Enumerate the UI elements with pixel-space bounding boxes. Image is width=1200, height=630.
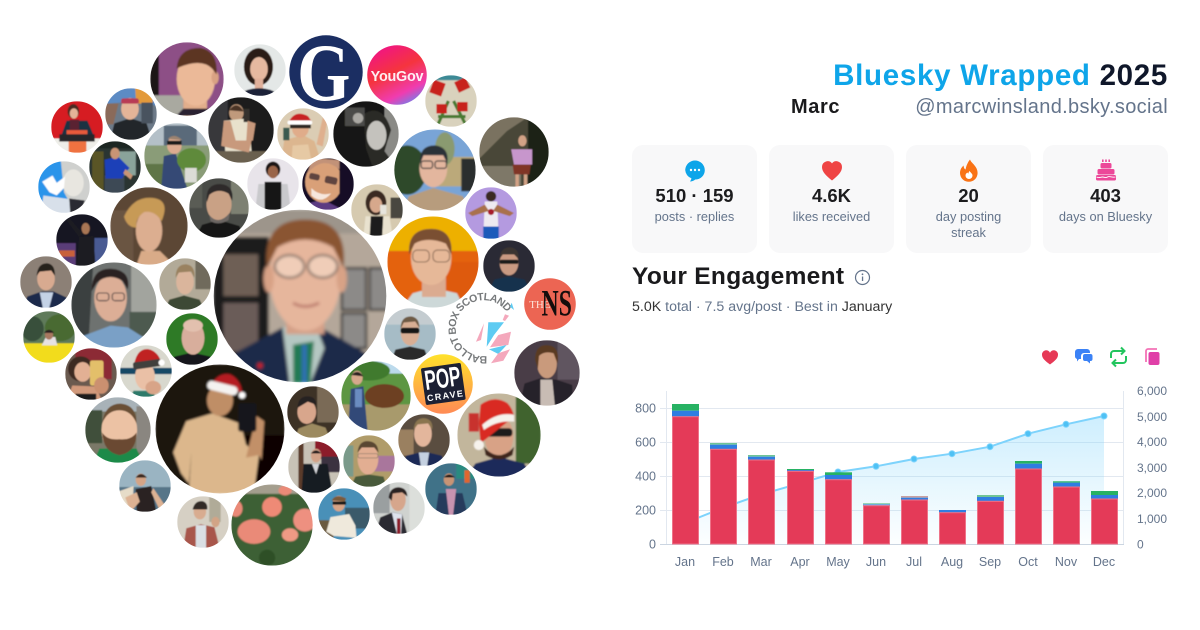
avatar: man in santa hat eating <box>120 345 172 397</box>
avatar: man in plaid shirt <box>177 496 229 548</box>
avatar: woman with dark hair <box>234 44 286 96</box>
avatar: man in sweater with santa hat <box>156 364 284 494</box>
avatar: older man with dark glasses <box>483 240 535 292</box>
right axis labels: 0 <box>1137 538 1144 552</box>
heading: your engagement: Your Engagement <box>632 263 844 290</box>
stat card: posting streak: 20 <box>958 185 979 206</box>
avatar: man with stubble in a room <box>159 258 211 310</box>
stat card: days on Bluesky: days on Bluesky <box>1059 209 1152 224</box>
avatar: man with highland cow <box>341 361 411 431</box>
avatar: man in santa hat with red nose <box>457 393 541 477</box>
avatar: smiling man with glasses, purple tones <box>302 158 354 210</box>
month labels: Jul <box>906 555 922 569</box>
month labels: May <box>826 555 851 569</box>
avatar: man on purple background <box>150 42 224 116</box>
combined bar and line chart <box>635 384 1167 569</box>
avatar: person sitting on rocks <box>479 117 549 187</box>
avatar: person with red headband <box>105 88 157 140</box>
handle: @marcwinsland.bsky.social <box>915 96 1168 118</box>
avatar: man in white tee by railing <box>318 488 370 540</box>
stat card: posting streak: day posting <box>936 209 1001 224</box>
right axis labels: 1,000 <box>1137 512 1167 526</box>
avatar: person in yellow field <box>23 311 75 363</box>
stat card: posting streak: streak <box>951 225 986 240</box>
avatar: woman with white jacket <box>247 158 299 210</box>
month labels: Jun <box>866 555 886 569</box>
left axis labels: 400 <box>635 470 656 484</box>
avatar: main profile portrait <box>214 210 386 382</box>
stat card: posts and replies: 510 · 159 <box>655 185 734 206</box>
stat card: likes received: 4.6K <box>812 185 851 206</box>
right axis labels: 6,000 <box>1137 384 1167 398</box>
left axis labels <box>635 402 656 552</box>
avatar: bald man among leaves <box>166 313 218 365</box>
avatar: woman with phone case <box>65 348 117 400</box>
title: Bluesky Wrapped 2025 <box>833 59 1168 92</box>
monthly bars <box>672 404 1118 544</box>
logo: The New Statesman: THE <box>529 299 551 311</box>
icon: quotes <box>1146 349 1160 365</box>
display name: Marc <box>791 96 840 118</box>
right axis labels <box>1137 384 1167 552</box>
stat card: posts and replies: posts · replies <box>655 209 734 224</box>
month labels <box>675 555 1115 569</box>
month labels: Sep <box>979 555 1001 569</box>
avatar: man with sunglasses on a boat <box>119 460 171 512</box>
avatar: man in blue polo <box>89 141 141 193</box>
logo: Being Liberal butterfly <box>38 161 90 213</box>
left axis labels: 200 <box>635 504 656 518</box>
avatar: man in patterned coat <box>425 463 477 515</box>
month labels: Nov <box>1055 555 1078 569</box>
avatar bubble cluster <box>20 35 580 566</box>
logo: The New Statesman <box>524 278 576 330</box>
month labels: Feb <box>712 555 734 569</box>
avatar: pink begonia flowers <box>231 484 313 566</box>
avatar: red flower star art <box>425 75 477 127</box>
avatar: man in suit on grey background <box>20 256 72 308</box>
avatar: man holding a plant <box>144 123 210 189</box>
avatar: black and white woman with camera <box>333 101 399 167</box>
right axis labels: 5,000 <box>1137 410 1167 424</box>
month labels: Dec <box>1093 555 1115 569</box>
avatar: man in suit with red tie <box>373 482 425 534</box>
left axis labels: 0 <box>649 538 656 552</box>
right axis labels: 3,000 <box>1137 461 1167 475</box>
avatar: man with orange and yellow painting <box>387 216 479 308</box>
avatar: Han Solo style man <box>514 340 580 406</box>
avatar: blond man in blue suit <box>398 414 450 466</box>
month labels: Apr <box>790 555 810 569</box>
month labels: Jan <box>675 555 695 569</box>
stat card: days on Bluesky: 403 <box>1090 185 1121 206</box>
chart legend icons <box>1042 346 1160 368</box>
logo: Ballot Box Scotland: BALLOT BOX SCOTLAND <box>448 292 511 364</box>
avatar: bearded man with green shirt <box>85 397 151 463</box>
right axis labels: 2,000 <box>1137 486 1167 500</box>
stat card: days on Bluesky <box>1043 145 1168 253</box>
engagement summary: 5.0K total · 7.5 avg/post · Best in January <box>632 299 892 315</box>
avatar: man with striped shirt <box>287 386 339 438</box>
avatar: man in tuxedo <box>288 441 340 493</box>
icon: replies <box>1075 349 1092 364</box>
avatar: blond man <box>110 187 188 265</box>
avatar: man with glasses on a train <box>71 262 157 348</box>
stat card: likes received <box>769 145 894 253</box>
icon: likes <box>1042 350 1058 364</box>
avatar: man with santa hat selfie <box>277 108 329 160</box>
stat card: likes received: likes received <box>793 209 870 224</box>
avatar: person at stage with raised arm <box>56 214 108 266</box>
avatar: woman mirror selfie <box>351 184 403 236</box>
avatar: man in sunglasses by the water <box>384 308 436 360</box>
right axis labels: 4,000 <box>1137 435 1167 449</box>
logo: Pop Crave: CRAVE <box>426 388 463 403</box>
logo: Pop Crave <box>413 354 473 414</box>
stat card: posts and replies <box>632 145 757 253</box>
cumulative area and line <box>685 413 1107 544</box>
avatar: smiling man with colourful jumper <box>343 435 395 487</box>
left axis labels: 800 <box>635 402 656 416</box>
stat card: posting streak <box>906 145 1031 253</box>
month labels: Oct <box>1018 555 1038 569</box>
logo: The Guardian: G <box>297 27 350 118</box>
logo: YouGov: YouGov <box>371 69 424 85</box>
month labels: Aug <box>941 555 963 569</box>
icon: info <box>854 270 870 286</box>
avatar: grey-haired man <box>189 178 249 238</box>
logo: YouGov <box>367 45 427 105</box>
icon: reposts <box>1111 348 1126 366</box>
left axis labels: 600 <box>635 436 656 450</box>
avatar: speaker at red podium <box>51 101 103 153</box>
avatar: person making a heart on purple <box>465 187 517 239</box>
month labels: Mar <box>750 555 772 569</box>
avatar: man in mirror selfie <box>208 97 274 163</box>
avatar: man with glasses under blue sky <box>394 129 476 211</box>
